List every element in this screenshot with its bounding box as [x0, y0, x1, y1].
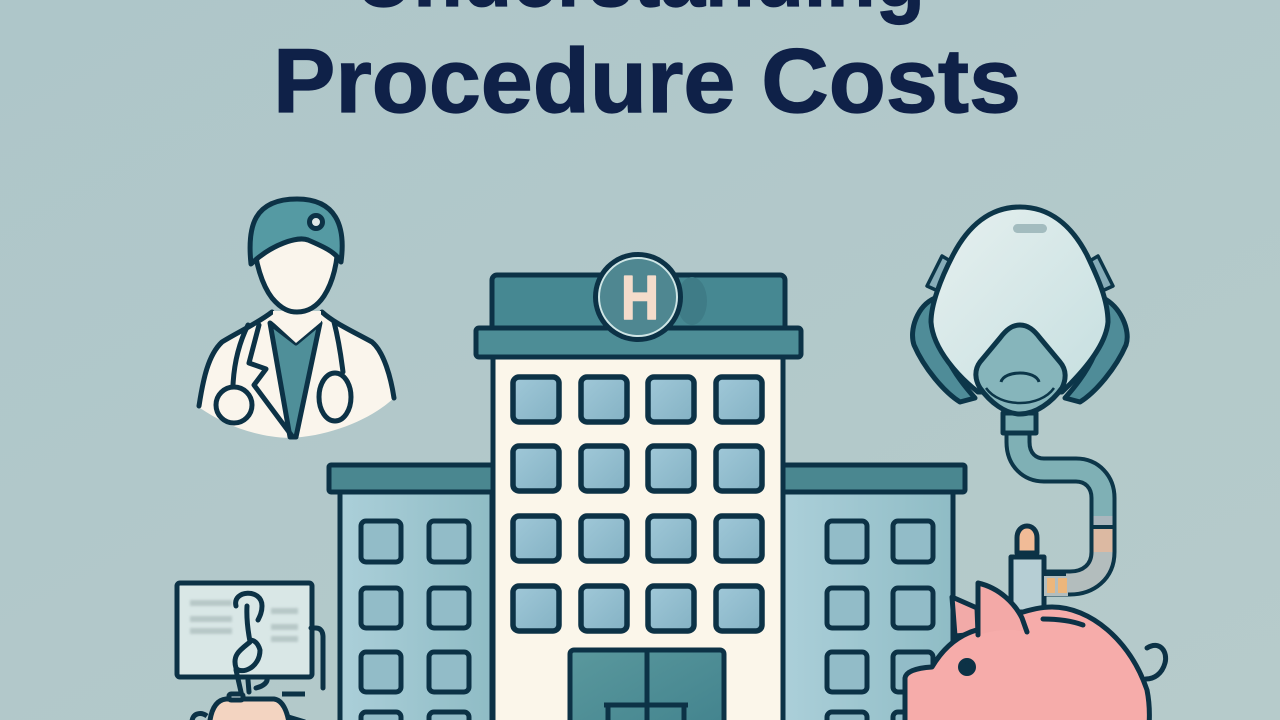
connector — [1011, 526, 1068, 612]
tube — [1018, 432, 1103, 583]
icon: anaesthesia mask — [913, 207, 1127, 583]
straps — [913, 298, 975, 402]
icon: doctor — [199, 199, 394, 438]
door — [570, 650, 724, 720]
front ear — [978, 583, 1027, 635]
body — [905, 607, 1149, 720]
H sign: H — [621, 264, 659, 333]
scrubs — [270, 323, 320, 437]
icon: piggy bank with connector — [905, 526, 1166, 720]
nose cup — [976, 325, 1065, 414]
coat — [200, 312, 394, 438]
tail — [1146, 645, 1166, 679]
coin slot — [1043, 619, 1083, 625]
H sign — [593, 252, 683, 342]
face — [254, 226, 338, 312]
central tower — [476, 275, 801, 720]
lapel — [249, 325, 292, 436]
eye — [960, 660, 974, 674]
connector — [1003, 413, 1036, 433]
windows — [513, 377, 762, 631]
icon: monitor with cable — [177, 583, 323, 692]
icon: tan device — [192, 694, 305, 720]
surgical cap — [250, 199, 342, 264]
stethoscope — [233, 325, 248, 385]
hospital building — [329, 252, 965, 720]
neck — [273, 311, 321, 343]
mask shell — [931, 207, 1108, 392]
title: Procedure Costs — [273, 31, 1021, 132]
left wing — [329, 465, 493, 720]
right wing — [783, 465, 965, 720]
cap button — [310, 216, 322, 228]
back ear — [952, 597, 978, 636]
